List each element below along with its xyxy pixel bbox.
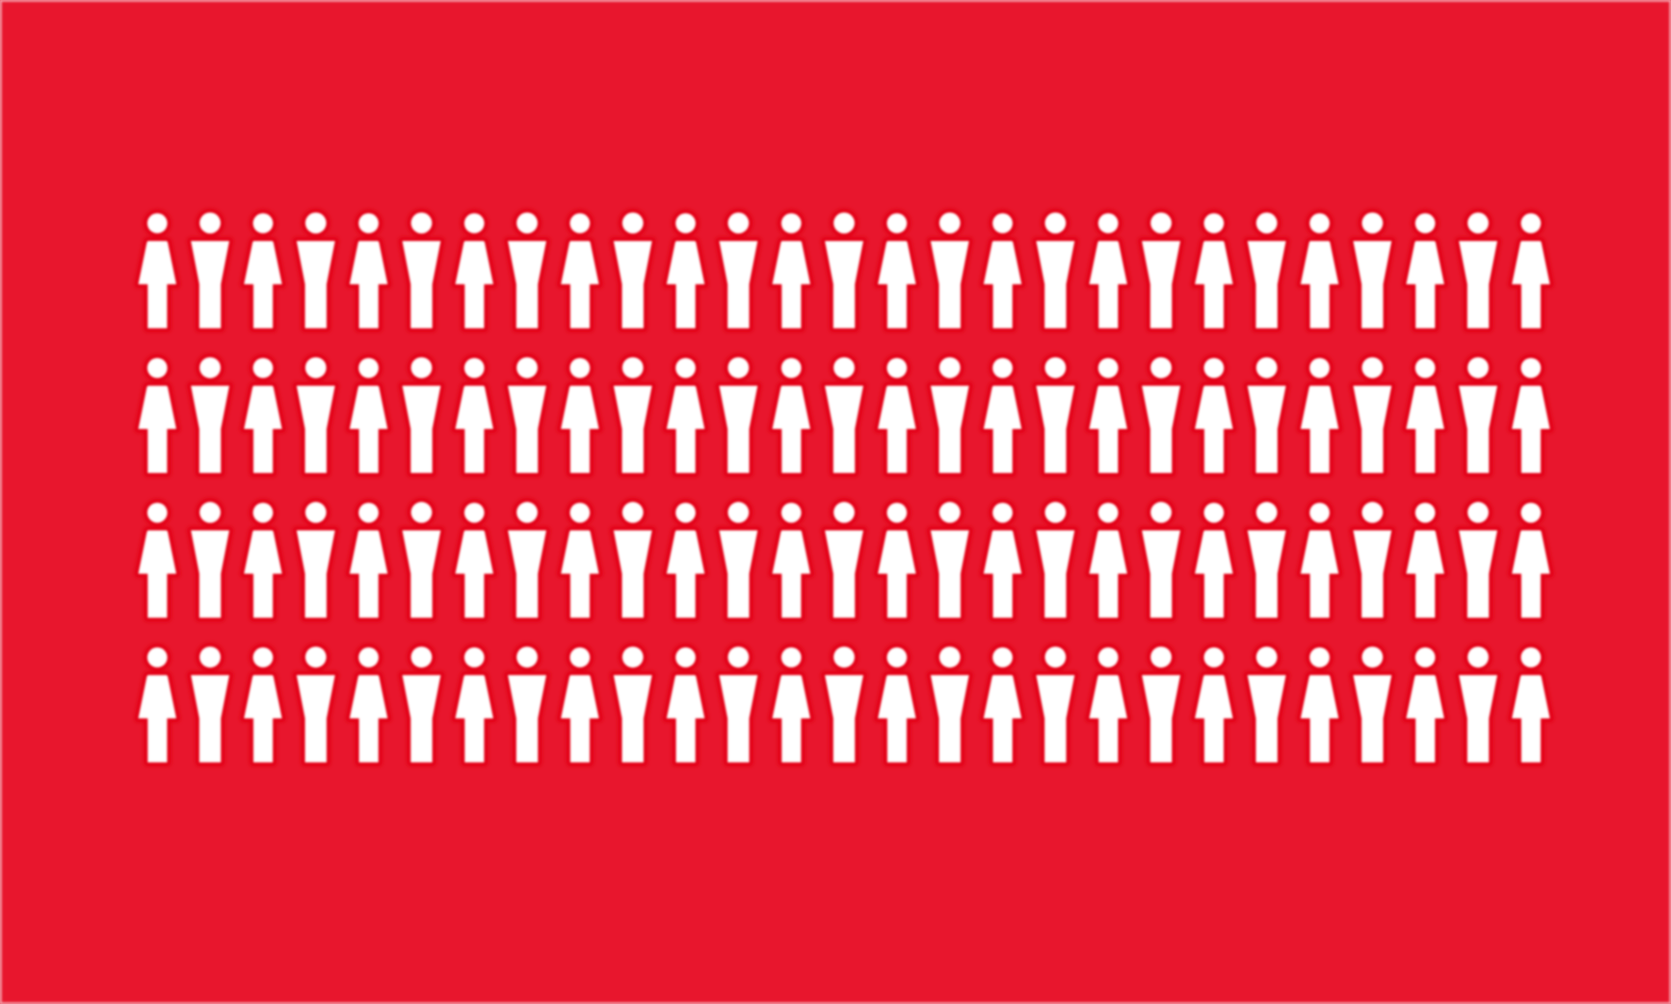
row 2 of figures: [138, 357, 1550, 473]
row 4 of figures: [138, 647, 1550, 762]
row 3 of figures: [138, 502, 1550, 618]
row halo: darker red glow around figures: [138, 212, 1550, 762]
row 1 of figures: [138, 212, 1550, 328]
figures: four rows of white pictograms: [138, 212, 1550, 762]
